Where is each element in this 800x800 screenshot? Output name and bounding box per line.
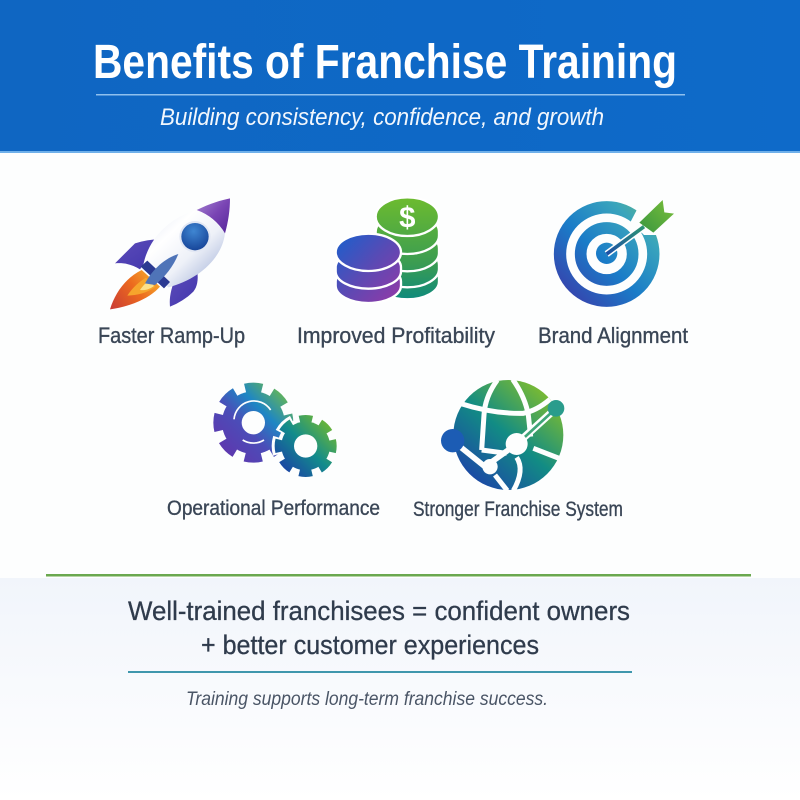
label: Operational Performance: Operational Performance xyxy=(167,497,380,520)
key message: + better customer experiences xyxy=(201,630,539,660)
label: Improved Profitability: Improved Profitability xyxy=(297,323,495,348)
title: Benefits of Franchise Training xyxy=(93,36,677,89)
key message xyxy=(128,596,630,660)
header banner xyxy=(0,0,800,153)
key message: Well-trained franchisees = confident owners xyxy=(128,596,630,626)
icon: rocket xyxy=(110,198,230,309)
teal divider xyxy=(128,671,632,673)
tagline: Training supports long-term franchise success. xyxy=(186,689,548,710)
label: Brand Alignment: Brand Alignment xyxy=(538,323,688,348)
icon: network globe xyxy=(441,379,564,491)
green divider xyxy=(46,574,751,576)
subtitle: Building consistency, confidence, and growth xyxy=(160,104,604,131)
icon: gears xyxy=(219,388,334,474)
label: Stronger Franchise System: Stronger Franchise System xyxy=(413,498,623,521)
footer panel xyxy=(0,574,800,800)
icon: target with arrow xyxy=(560,200,674,301)
dollar sign: $ xyxy=(399,202,415,235)
icon: coin stacks xyxy=(336,197,439,303)
title underline xyxy=(96,94,685,96)
label: Faster Ramp-Up: Faster Ramp-Up xyxy=(98,323,245,348)
